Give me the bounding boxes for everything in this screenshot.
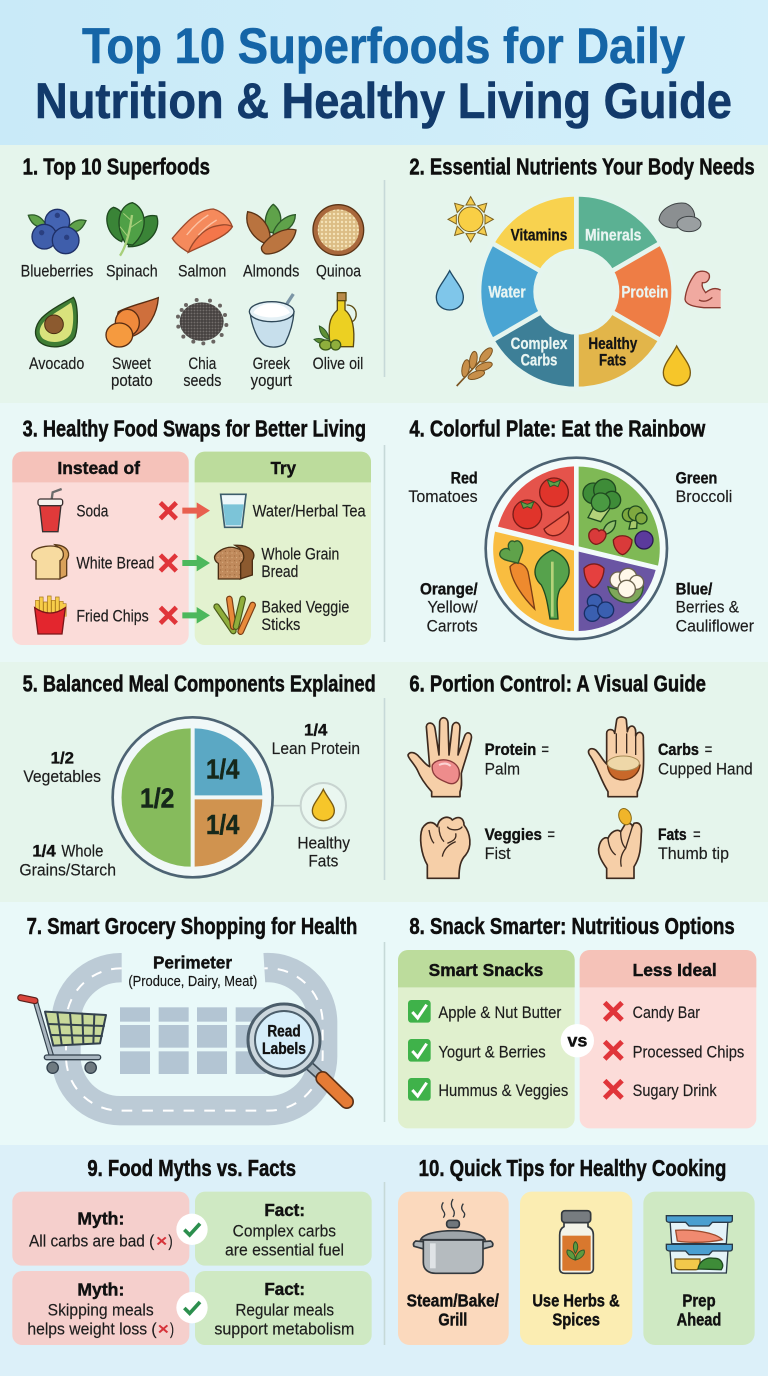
card: myth 1: × — [156, 1232, 168, 1251]
icon: salmon — [172, 209, 232, 252]
label: Greek yogurt: yogurt — [251, 371, 292, 390]
card: fact 2: Fact: — [264, 1279, 305, 1299]
label: healthy fats — [297, 833, 351, 871]
icon: check badge 2 — [176, 1292, 208, 1323]
heading: section 5: 5. Balanced Meal Components Explained — [23, 671, 376, 697]
icon: sun — [448, 197, 493, 242]
card: fact 2 — [195, 1271, 372, 1345]
label: vegetables: Vegetables — [23, 767, 101, 786]
column: smart snacks: Smart Snacks — [429, 960, 543, 980]
labels: nutrient names: Minerals — [585, 227, 641, 245]
arrow: white to whole grain — [182, 555, 210, 571]
chart: rainbow plate — [486, 458, 667, 639]
column: instead of: Instead of — [57, 458, 141, 478]
icon: whole grain bread — [215, 545, 254, 579]
card: fact 1: Complex carbs — [233, 1222, 336, 1241]
labels: nutrient names: Protein — [621, 283, 668, 301]
icon: veggie sticks — [217, 599, 253, 632]
label: vegetables: 1/2 — [51, 748, 74, 767]
labels: nutrient names: Vitamins — [511, 227, 567, 245]
column: less ideal: Candy Bar — [633, 1003, 700, 1022]
label: healthy fats: Fats — [308, 852, 338, 871]
column: smart snacks: Yogurt & Berries — [438, 1042, 546, 1061]
icon: healthy fats drop — [301, 783, 346, 828]
panel: 1. top 10 superfoods — [21, 154, 364, 390]
icon: greek yogurt — [249, 294, 294, 347]
card: myth 1: Myth: — [77, 1208, 124, 1228]
column: instead of: Soda — [76, 502, 109, 521]
chart: balanced plate: 1/4 — [206, 809, 240, 840]
card: myth 2: ) — [170, 1319, 174, 1338]
icon: avocado — [36, 297, 77, 347]
heading: section 1: 1. Top 10 Superfoods — [23, 154, 210, 180]
icon: meal prep containers — [666, 1216, 732, 1273]
label: protein palm: = — [541, 740, 549, 759]
label: Chia seeds — [183, 354, 221, 390]
column: try — [195, 452, 371, 645]
labels: plate colours: Tomatoes — [408, 487, 478, 506]
card: myth 1 — [12, 1192, 189, 1266]
icons: red crosses — [605, 1003, 622, 1098]
panel: 7. smart grocery shopping — [21, 913, 357, 1111]
label: veggies fist: Fist — [485, 844, 511, 863]
card: fact 2: Regular meals — [235, 1301, 334, 1320]
icon: spinach — [107, 203, 158, 256]
icon: open palm with meat — [408, 718, 471, 797]
card: prep ahead: Prep — [682, 1291, 716, 1311]
icon: check badge 1 — [176, 1214, 208, 1245]
heading: section 7: 7. Smart Grocery Shopping for Health — [27, 913, 357, 939]
labels: nutrient names: Complex — [511, 335, 567, 353]
icons: tomatoes — [513, 478, 569, 536]
store aisles grid — [120, 1007, 266, 1074]
column: try: Whole Grain — [261, 545, 339, 564]
label: Quinoa: Quinoa — [316, 262, 362, 281]
column: less ideal: Sugary Drink — [633, 1081, 717, 1100]
label: Sweet potato — [111, 354, 153, 390]
connector to healthy fats — [273, 803, 300, 808]
card: steam bake grill — [398, 1192, 509, 1345]
title — [35, 18, 732, 129]
label: fats thumb tip: Fats — [658, 825, 687, 844]
card: fact 1 — [195, 1192, 372, 1266]
column: less ideal — [580, 950, 756, 1128]
labels: nutrient names: Water — [488, 283, 526, 301]
column: instead of: Fried Chips — [76, 607, 149, 626]
heading: section 4: 4. Colorful Plate: Eat the Rainbow — [409, 416, 706, 442]
panel: 6. portion control — [408, 671, 753, 878]
card: fact 2: support metabolism — [214, 1319, 354, 1338]
column: less ideal: Less Ideal — [633, 960, 717, 980]
icon: soda — [38, 489, 63, 532]
icon: sweet potato — [106, 298, 158, 347]
panel: 2. essential nutrients — [409, 154, 755, 389]
icons: green check boxes — [408, 1000, 431, 1101]
label: fats thumb tip: Thumb tip — [658, 844, 729, 863]
column: try: Sticks — [261, 615, 300, 634]
icons: broccoli and berries — [583, 479, 653, 555]
label: perimeter: Perimeter — [153, 953, 232, 973]
panel: 4. colorful plate — [408, 416, 754, 639]
labels: plate colours: Blue/ — [676, 579, 713, 598]
column: instead of: White Bread — [76, 554, 154, 573]
labels: plate colours: Yellow/ — [427, 598, 478, 617]
label: perimeter: (Produce, Dairy, Meat) — [128, 974, 257, 990]
labels: nutrient names: Carbs — [521, 352, 557, 370]
column: instead of — [12, 452, 189, 645]
card: myth 1: ) — [168, 1232, 173, 1251]
label: Greek yogurt — [251, 354, 292, 390]
card: prep ahead: Ahead — [677, 1309, 721, 1329]
label: fats thumb tip: = — [693, 825, 701, 844]
labels: plate colours: Green — [676, 468, 717, 487]
store perimeter road — [66, 968, 323, 1111]
card: steam bake grill: Grill — [438, 1309, 467, 1329]
column: smart snacks: Hummus & Veggies — [438, 1081, 568, 1100]
label: lean protein — [272, 720, 360, 758]
card: herbs and spices: Spices — [552, 1309, 600, 1329]
icon: carrot — [500, 541, 535, 609]
label: vegetables — [23, 748, 101, 786]
label: healthy fats: Healthy — [297, 833, 351, 852]
label: lean protein: Lean Protein — [272, 739, 360, 758]
label: protein palm: Palm — [485, 759, 520, 778]
heading: section 3: 3. Healthy Food Swaps for Better Living — [23, 416, 366, 442]
label: whole grains: 1/4 — [32, 842, 56, 861]
heading: section 6: 6. Portion Control: A Visual Guide — [409, 671, 706, 697]
label: Olive oil: Olive oil — [313, 354, 363, 373]
column: try: Try — [271, 458, 296, 478]
card: myth 2 — [12, 1271, 189, 1345]
labels: nutrient names: Fats — [599, 352, 626, 370]
label: Avocado: Avocado — [29, 354, 84, 373]
icon: leafy green — [535, 550, 569, 619]
label: Chia seeds: seeds — [183, 371, 221, 390]
badge: vs: vs — [567, 1031, 587, 1051]
panel: 9. food myths vs facts — [12, 1155, 372, 1345]
icon: wheat — [457, 346, 495, 386]
badge: vs — [561, 1024, 594, 1057]
labels: plate colours: Red — [451, 468, 478, 487]
icon: almonds — [247, 204, 296, 254]
panel: 10. quick cooking tips — [398, 1155, 755, 1345]
icons: red crosses — [160, 503, 176, 623]
icon: magnifying glass read labels — [248, 1004, 347, 1102]
card: fact 1: are essential fuel — [225, 1240, 344, 1259]
card: myth 2: × — [158, 1319, 169, 1338]
icon: olive oil — [314, 293, 356, 350]
label: perimeter — [128, 953, 257, 990]
label: carbs cupped hand: Carbs — [658, 740, 699, 759]
chart: balanced plate: 1/2 — [140, 783, 174, 814]
label: Blueberries: Blueberries — [21, 262, 93, 281]
label: carbs cupped hand: Cupped Hand — [658, 759, 753, 778]
column: try: Baked Veggie — [261, 597, 349, 616]
label: carbs cupped hand — [658, 740, 753, 778]
card: myth 2: Myth: — [77, 1280, 124, 1300]
label: whole grains: Grains/Starch — [19, 860, 116, 879]
icon: rocks — [659, 203, 701, 232]
icon: blueberries — [28, 209, 86, 254]
chart: nutrient donut — [479, 194, 674, 389]
label: Sweet potato: potato — [111, 371, 153, 390]
card: herbs and spices: Use Herbs & — [532, 1291, 620, 1311]
column: try: Water/Herbal Tea — [253, 502, 366, 521]
label: Salmon: Salmon — [178, 262, 226, 281]
label: whole grains — [19, 842, 116, 879]
arrow: chips to veggie sticks — [182, 607, 210, 624]
icon: chia seeds — [176, 298, 228, 345]
label: Spinach: Spinach — [106, 262, 158, 281]
icon: thumb tip — [599, 807, 642, 878]
icon: quinoa — [313, 205, 364, 255]
labels: nutrient names: Healthy — [588, 335, 637, 353]
icon: spice jar — [560, 1211, 593, 1273]
icon: oil drop — [663, 346, 690, 386]
labels: plate colours: Broccoli — [676, 487, 732, 506]
panel: 8. snack smarter — [398, 913, 756, 1128]
column: try: Bread — [261, 562, 298, 581]
card: myth 1: All carbs are bad ( — [29, 1232, 155, 1251]
icon: water glass — [221, 494, 246, 527]
arrow: soda to water — [182, 502, 210, 519]
label: protein palm — [485, 740, 549, 778]
icon: water drop — [436, 271, 463, 310]
label: Almonds: Almonds — [243, 262, 299, 281]
icon: magnifying glass read labels: Read — [267, 1022, 301, 1041]
icon: cupped hand with grains — [589, 717, 644, 797]
label: fats thumb tip — [658, 825, 729, 863]
label: protein palm: Protein — [485, 740, 536, 759]
column: smart snacks: Apple & Nut Butter — [438, 1003, 562, 1022]
icon: shopping cart — [21, 998, 106, 1073]
chart: balanced plate: 1/4 — [206, 753, 240, 784]
icon: white bread — [32, 545, 69, 579]
title: Top 10 Superfoods for Daily — [82, 18, 685, 74]
column: less ideal: Processed Chips — [633, 1042, 744, 1061]
icon: fist — [421, 817, 470, 878]
label: Sweet potato: Sweet — [112, 354, 151, 373]
labels: plate colours — [408, 468, 754, 635]
labels: plate colours: Berries & — [676, 598, 739, 617]
card: herbs and spices — [520, 1192, 632, 1345]
icon: muscle arm — [685, 271, 721, 308]
chart: balanced plate — [113, 717, 273, 877]
label: Chia seeds: Chia — [188, 354, 217, 373]
icon: steaming pot — [413, 1199, 493, 1273]
labels: nutrient names — [488, 227, 668, 370]
card: myth 2: Skipping meals — [48, 1301, 154, 1320]
label: lean protein: 1/4 — [304, 720, 328, 739]
icon: magnifying glass read labels: Labels — [262, 1039, 306, 1058]
labels: plate colours: Cauliflower — [676, 616, 754, 635]
card: prep ahead — [643, 1192, 755, 1345]
labels: plate colours: Carrots — [427, 616, 478, 635]
panel: 3. healthy food swaps — [12, 416, 371, 645]
label: veggies fist — [485, 825, 555, 863]
label: whole grains: Whole — [61, 842, 103, 861]
panel: 5. balanced meal — [19, 671, 376, 879]
labels: plate colours: Orange/ — [420, 579, 478, 598]
label: Greek yogurt: Greek — [253, 354, 291, 373]
card: fact 1: Fact: — [264, 1200, 305, 1220]
label: veggies fist: = — [547, 825, 555, 844]
column: smart snacks — [398, 950, 575, 1128]
heading: section 9: 9. Food Myths vs. Facts — [87, 1155, 296, 1181]
label: veggies fist: Veggies — [485, 825, 542, 844]
icons: purple foods — [584, 564, 644, 621]
card: steam bake grill: Steam/Bake/ — [407, 1291, 499, 1311]
card: myth 2: helps weight loss ( — [27, 1319, 157, 1338]
icon: fries — [35, 596, 65, 634]
label: carbs cupped hand: = — [705, 740, 712, 759]
